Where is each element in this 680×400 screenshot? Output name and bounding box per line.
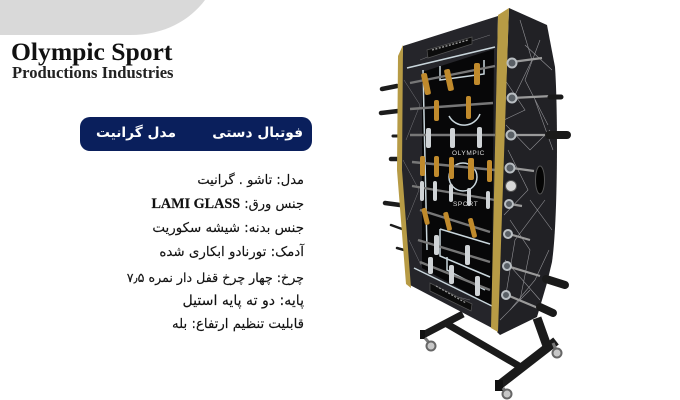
gold trim far side xyxy=(397,45,411,288)
left side rod handles xyxy=(381,86,404,250)
specification list: جنس ورق: LAMI GLASS xyxy=(151,196,304,212)
specification list: پایه: دو ته پایه استیل xyxy=(182,293,304,309)
marble veins xyxy=(500,20,553,320)
far marble frame xyxy=(398,16,498,328)
center logo text: OLYMPIC xyxy=(452,150,485,157)
near marble side panel xyxy=(497,8,557,335)
foosball table illustration: SPORT xyxy=(453,201,478,208)
rods xyxy=(410,66,495,290)
stand and wheels xyxy=(420,314,562,398)
end vent bottom xyxy=(430,283,472,311)
specification list xyxy=(127,172,305,332)
field markings xyxy=(407,47,495,306)
playing field xyxy=(422,49,494,306)
title: company name: Olympic Sport xyxy=(11,37,172,66)
heading badge: product and model: مدل گرانیت xyxy=(96,125,176,141)
decorative grey corner shape xyxy=(0,0,205,35)
ball return slot and coin mechanism xyxy=(506,166,544,194)
gold trim near side xyxy=(491,8,509,332)
silver players xyxy=(420,127,490,296)
foosball table illustration xyxy=(378,8,571,400)
gold players xyxy=(420,63,492,238)
subtitle: company descriptor: Productions Industries xyxy=(12,63,174,82)
far frame veins xyxy=(403,35,490,300)
specification list: جنس بدنه: شیشه سکوریت xyxy=(152,221,304,236)
bearing rings xyxy=(502,58,516,299)
right side handles xyxy=(540,97,567,313)
heading badge: product and model: فوتبال دستی xyxy=(212,125,303,141)
end vent top xyxy=(427,37,472,58)
specification list: مدل: تاشو . گرانیت xyxy=(197,173,304,188)
specification list: آدمک: تورنادو ابکاری شده xyxy=(159,245,304,260)
heading badge: product and model xyxy=(80,117,312,151)
right side rods xyxy=(507,58,552,308)
specification list: چرخ: چهار چرخ قفل دار نمره ۷٫۵ xyxy=(127,270,304,285)
specification list: قابلیت تنظیم ارتفاع: بله xyxy=(172,317,304,332)
